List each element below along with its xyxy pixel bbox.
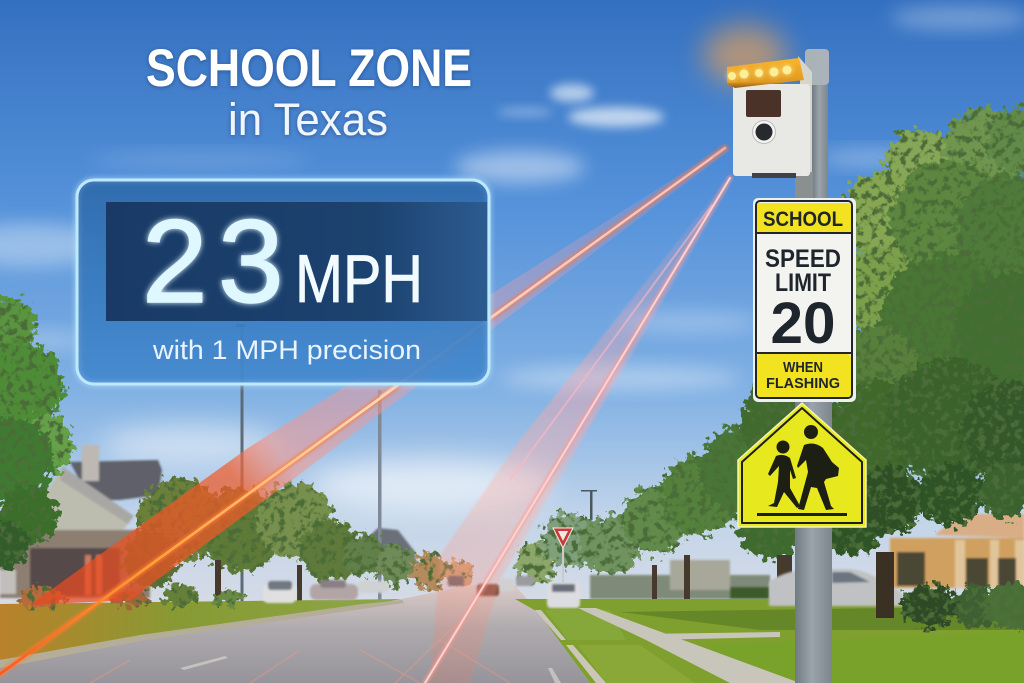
pole main [795, 398, 832, 683]
school label: SCHOOL [763, 208, 843, 231]
yellow header [757, 203, 851, 233]
right lawn [515, 599, 1024, 683]
distant houses [360, 528, 415, 570]
left tree [0, 297, 74, 569]
yellow footer [757, 354, 851, 397]
precision caption: with 1 MPH precision [152, 335, 421, 365]
right house [890, 514, 1024, 588]
housing side [798, 56, 812, 174]
pole upper [812, 85, 828, 205]
lamps [728, 66, 792, 80]
mid-street trees [122, 478, 474, 590]
side path [640, 632, 780, 640]
speed readout panel [77, 180, 489, 384]
white SUV [547, 582, 580, 608]
amber light bar [727, 58, 804, 88]
camera unit [703, 25, 812, 178]
trunks in the tree row [215, 555, 792, 617]
camera window [746, 90, 781, 117]
street poles [236, 324, 597, 606]
tree trunk by car [876, 552, 894, 618]
left curb [0, 600, 404, 668]
when label: WHEN [783, 359, 823, 376]
panel frame [77, 180, 489, 384]
icon: walking child [768, 440, 800, 508]
speed label: SPEED [765, 245, 841, 273]
pole lower [795, 172, 813, 202]
pole clamp [805, 49, 829, 85]
wide red laser beam [30, 148, 730, 605]
sign plate [738, 403, 866, 527]
icon: walking adult [797, 425, 839, 510]
yield sign [553, 528, 573, 584]
right curb [535, 610, 566, 640]
speed number: 20 [770, 291, 836, 356]
limit label: LIMIT [775, 269, 831, 297]
road light lattice [90, 625, 510, 683]
flashing label: FLASHING [766, 375, 840, 392]
subtitle: in Texas: in Texas [228, 94, 388, 145]
road markings [180, 656, 561, 683]
laser beam core lines [0, 148, 730, 683]
hedge [902, 582, 1024, 630]
housing foot [752, 173, 796, 178]
far right tree row [516, 375, 894, 582]
sign body [753, 198, 856, 402]
left house [0, 445, 162, 598]
title [146, 39, 472, 145]
parked cars left [263, 580, 388, 603]
light glow [703, 25, 787, 85]
pedestrian crossing sign [738, 403, 866, 527]
unit: MPH [295, 241, 423, 317]
round lens [752, 120, 776, 144]
background low hedge and houses [590, 560, 770, 599]
ground line [757, 513, 847, 516]
left shrubs [18, 584, 242, 609]
road surface [0, 585, 590, 683]
big right tree [830, 106, 1024, 534]
left lawn [0, 599, 402, 660]
dark display [106, 202, 487, 321]
sidewalk [578, 608, 800, 683]
title line: school zone: SCHOOL ZONE [146, 39, 472, 98]
speed digits: 23 [142, 196, 284, 328]
distant traffic [448, 576, 534, 596]
school speed limit sign [753, 198, 856, 402]
laser beam B band [430, 182, 730, 683]
housing [733, 84, 810, 176]
silver car [769, 569, 905, 611]
